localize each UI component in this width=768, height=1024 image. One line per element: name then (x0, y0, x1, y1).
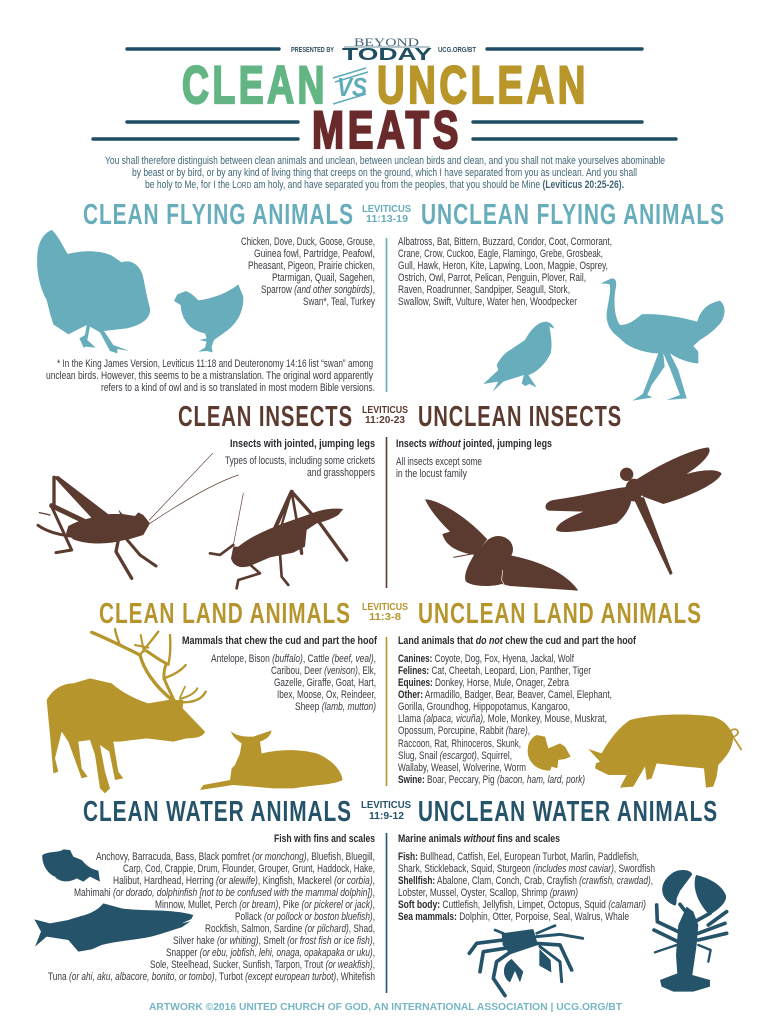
list: clean water animals (48, 833, 375, 983)
list: unclean land animals: Equines: Donkey, Horse, Mule, Onager, Zebra (398, 677, 569, 689)
panel: insects (38, 401, 722, 591)
list: clean birds: Pheasant, Pigeon, Prairie chicken, (248, 260, 375, 272)
intro verse: by beast or by bird, or by any kind of living thing that creeps on the ground, which I have separated from you as unclean. And you shall (132, 167, 637, 179)
heading: clean land animals: CLEAN LAND ANIMALS (99, 598, 351, 630)
list: unclean birds: Swallow, Swift, Vulture, Water hen, Woodpecker (398, 296, 577, 308)
icon: eagle (483, 322, 554, 392)
icon: chicken (174, 284, 243, 352)
list: clean land animals: Caribou, Deer (venison), Elk, (271, 665, 376, 677)
icon: moth (425, 499, 578, 591)
list: clean birds: Swan*, Teal, Turkey (303, 296, 375, 308)
icon: salmon (34, 903, 193, 952)
presented by label: PRESENTED BY (291, 47, 334, 54)
list: unclean land animals: Opossum, Porcupine, Rabbit (hare), (398, 725, 530, 737)
title: vs (333, 68, 368, 104)
list: unclean birds (398, 236, 612, 308)
list: clean land animals (182, 635, 377, 713)
reference: Leviticus 11:9-12: 11:9-12 (369, 811, 404, 822)
intro verse: be holy to Me, for I the LORD am holy, and have separated you from the peoples, that you should be Mine (Leviticus 20:25-26). (145, 179, 624, 191)
list: unclean land animals: Swine: Boar, Peccary, Pig (bacon, ham, lard, pork) (398, 774, 585, 786)
intro verse (105, 155, 665, 191)
text: unclean insects: in the locust family (396, 468, 467, 480)
header (93, 35, 676, 160)
list: clean land animals: Antelope, Bison (buffalo), Cattle (beef, veal), (211, 653, 376, 665)
list: unclean water animals (398, 833, 655, 923)
reference: Leviticus 11:13-19: 11:13-19 (366, 214, 408, 225)
title: vs: VS (337, 72, 368, 102)
text: unclean insects: Insects without jointed, jumping legs (396, 438, 552, 450)
reference: Leviticus 11:20-23: 11:20-23 (365, 415, 405, 426)
text: clean insects: Insects with jointed, jumping legs (230, 438, 375, 450)
icon: grasshopper (210, 492, 347, 588)
footer credit: ARTWORK ©2016 UNITED CHURCH OF GOD, AN INTERNATIONAL ASSOCIATION | UCG.ORG/BT (149, 1001, 623, 1013)
panel: land animals (47, 598, 742, 793)
list: clean water animals: Rockfish, Salmon, Sardine (or pilchard), Shad, (205, 923, 375, 935)
reference: Leviticus 11:9-12 (361, 800, 411, 822)
logo: Beyond Today: TODAY (342, 44, 432, 64)
list: unclean land animals: Slug, Snail (escargot), Squirrel, (398, 750, 512, 762)
footnote: swan: refers to a kind of owl and is so translated in most modern Bible versions. (101, 382, 375, 394)
list: clean water animals: Pollack (or pollock or boston bluefish), (235, 911, 375, 923)
title: clean: CLEAN (182, 56, 328, 115)
list: unclean birds: Ostrich, Owl, Parrot, Pelican, Penguin, Plover, Rail, (398, 272, 586, 284)
title: unclean: UNCLEAN (377, 56, 589, 115)
list: clean water animals: Sole, Steelhead, Sucker, Sunfish, Tarpon, Trout (or weakfish), (150, 959, 375, 971)
list: clean land animals: Mammals that chew the cud and part the hoof (182, 635, 377, 647)
logo: Beyond Today (342, 35, 432, 64)
list: unclean land animals: Raccoon, Rat, Rhinoceros, Skunk, (398, 738, 521, 750)
list: unclean water animals: Marine animals without fins and scales (398, 833, 560, 845)
list: unclean water animals: Shark, Stickleback, Squid, Sturgeon (includes most caviar), Swordfish (398, 863, 655, 875)
list: clean land animals: Ibex, Moose, Ox, Reindeer, (277, 689, 376, 701)
text: clean insects (225, 438, 375, 479)
list: unclean land animals: Other: Armadillo, Badger, Bear, Beaver, Camel, Elephant, (398, 689, 612, 701)
list: clean birds: Ptarmigan, Quail, Sagehen, (272, 272, 375, 284)
panel: water animals (34, 796, 727, 996)
list: clean birds: Chicken, Dove, Duck, Goose, Grouse, (241, 236, 375, 248)
footnote: swan (46, 358, 375, 394)
list: clean land animals: Sheep (lamb, mutton) (295, 701, 376, 713)
text: unclean insects (396, 438, 552, 480)
icon: cricket (38, 453, 238, 578)
icon: ostrich (601, 278, 725, 401)
list: unclean water animals: Shellfish: Abalone, Clam, Conch, Crab, Crayfish (crawfish, crawdad), (398, 875, 653, 887)
reference: Leviticus 11:3-8: 11:3-8 (369, 612, 401, 623)
list: unclean birds: Crane, Crow, Cuckoo, Eagle, Flamingo, Grebe, Grosbeak, (398, 248, 603, 260)
heading: clean water animals: CLEAN WATER ANIMALS (83, 796, 352, 828)
footnote: swan: * In the King James Version, Leviticus 11:18 and Deuteronomy 14:16 list “swan” among (57, 358, 373, 370)
reference: Leviticus 11:20-23 (362, 405, 408, 426)
list: unclean water animals: Lobster, Mussel, Oyster, Scallop, Shrimp (prawn) (398, 887, 578, 899)
icon: pig (588, 714, 742, 788)
list: clean birds: Sparrow (and other songbirds), (261, 284, 375, 296)
list: clean birds (241, 236, 375, 308)
icon: squirrel (528, 735, 571, 771)
list: unclean land animals: Wallaby, Weasel, Wolverine, Worm (398, 762, 526, 774)
reference: Leviticus 11:3-8: LEVITICUS (362, 602, 408, 613)
list: unclean land animals: Land animals that do not chew the cud and part the hoof (398, 635, 636, 647)
list: clean water animals: Tuna (or ahi, aku, albacore, bonito, or tombo), Turbot (except european turbot), Whitefish (48, 971, 375, 983)
list: clean water animals: Halibut, Hardhead, Herring (or alewife), Kingfish, Mackerel (or corbia), (113, 875, 375, 887)
list: unclean land animals: Llama (alpaca, vicuña), Mole, Monkey, Mouse, Muskrat, (398, 713, 607, 725)
list: clean birds: Guinea fowl, Partridge, Peafowl, (254, 248, 375, 260)
text: clean insects: Types of locusts, including some crickets (225, 455, 375, 467)
icon: fawn (200, 730, 343, 790)
title: meats: MEATS (312, 101, 462, 160)
icon: dragonfly (546, 447, 722, 575)
list: clean land animals: Gazelle, Giraffe, Goat, Hart, (274, 677, 376, 689)
logo: Beyond Today: BEYOND (354, 35, 419, 49)
heading: clean flying animals: CLEAN FLYING ANIMALS (83, 199, 354, 231)
reference: Leviticus 11:9-12: LEVITICUS (361, 800, 411, 811)
reference: Leviticus 11:3-8 (362, 602, 408, 623)
list: unclean water animals: Sea mammals: Dolphin, Otter, Porpoise, Seal, Walrus, Whale (398, 911, 629, 923)
icon: elk (47, 629, 206, 793)
list: unclean land animals: Canines: Coyote, Dog, Fox, Hyena, Jackal, Wolf (398, 653, 575, 665)
icon: crab (469, 926, 583, 996)
icon: turkey (37, 230, 150, 353)
list: unclean water animals: Fish: Bullhead, Catfish, Eel, European Turbot, Marlin, Paddlefish, (398, 851, 639, 863)
list: unclean birds: Raven, Roadrunner, Sandpiper, Seagull, Stork, (398, 284, 570, 296)
heading: clean insects: CLEAN INSECTS (178, 401, 353, 433)
icon: lobster (654, 870, 727, 992)
list: unclean land animals: Felines: Cat, Cheetah, Leopard, Lion, Panther, Tiger (398, 665, 591, 677)
list: unclean birds: Albatross, Bat, Bittern, Buzzard, Condor, Coot, Cormorant, (398, 236, 612, 248)
list: clean water animals: Mahimahi (or dorado, dolphinfish [not to be confused with the mammal dolphin]), (74, 887, 375, 899)
panel: flying animals (37, 199, 725, 401)
icon: small fish (42, 849, 100, 882)
reference: Leviticus 11:13-19 (362, 204, 411, 225)
list: clean water animals: Silver hake (or whiting), Smelt (or frost fish or ice fish), (173, 935, 375, 947)
list: clean water animals: Snapper (or ebu, jobfish, lehi, onaga, opakapaka or uku), (166, 947, 375, 959)
text: clean insects: and grasshoppers (307, 467, 375, 479)
reference: Leviticus 11:13-19: LEVITICUS (362, 204, 411, 215)
list: unclean land animals: Gorilla, Groundhog, Hippopotamus, Kangaroo, (398, 701, 570, 713)
list: unclean land animals (398, 635, 636, 786)
footnote: swan: unclean birds. However, this seems to be a mistranslation. The original word apparently (46, 370, 373, 382)
heading: unclean insects: UNCLEAN INSECTS (418, 401, 622, 433)
list: clean water animals: Anchovy, Barracuda, Bass, Black pomfret (or monchong), Bluefish, Bluegill, (96, 851, 375, 863)
list: unclean birds: Gull, Hawk, Heron, Kite, Lapwing, Loon, Magpie, Osprey, (398, 260, 608, 272)
website label: UCG.ORG/BT (438, 47, 477, 54)
list: clean water animals: Minnow, Mullet, Perch (or bream), Pike (or pickerel or jack), (155, 899, 375, 911)
list: unclean water animals: Soft body: Cuttlefish, Jellyfish, Limpet, Octopus, Squid (calamari) (398, 899, 646, 911)
text: unclean insects: All insects except some (396, 456, 482, 468)
list: clean water animals: Fish with fins and scales (274, 833, 375, 845)
reference: Leviticus 11:20-23: LEVITICUS (362, 405, 408, 416)
list: clean water animals: Carp, Cod, Crappie, Drum, Flounder, Grouper, Grunt, Haddock, Hake, (123, 863, 375, 875)
